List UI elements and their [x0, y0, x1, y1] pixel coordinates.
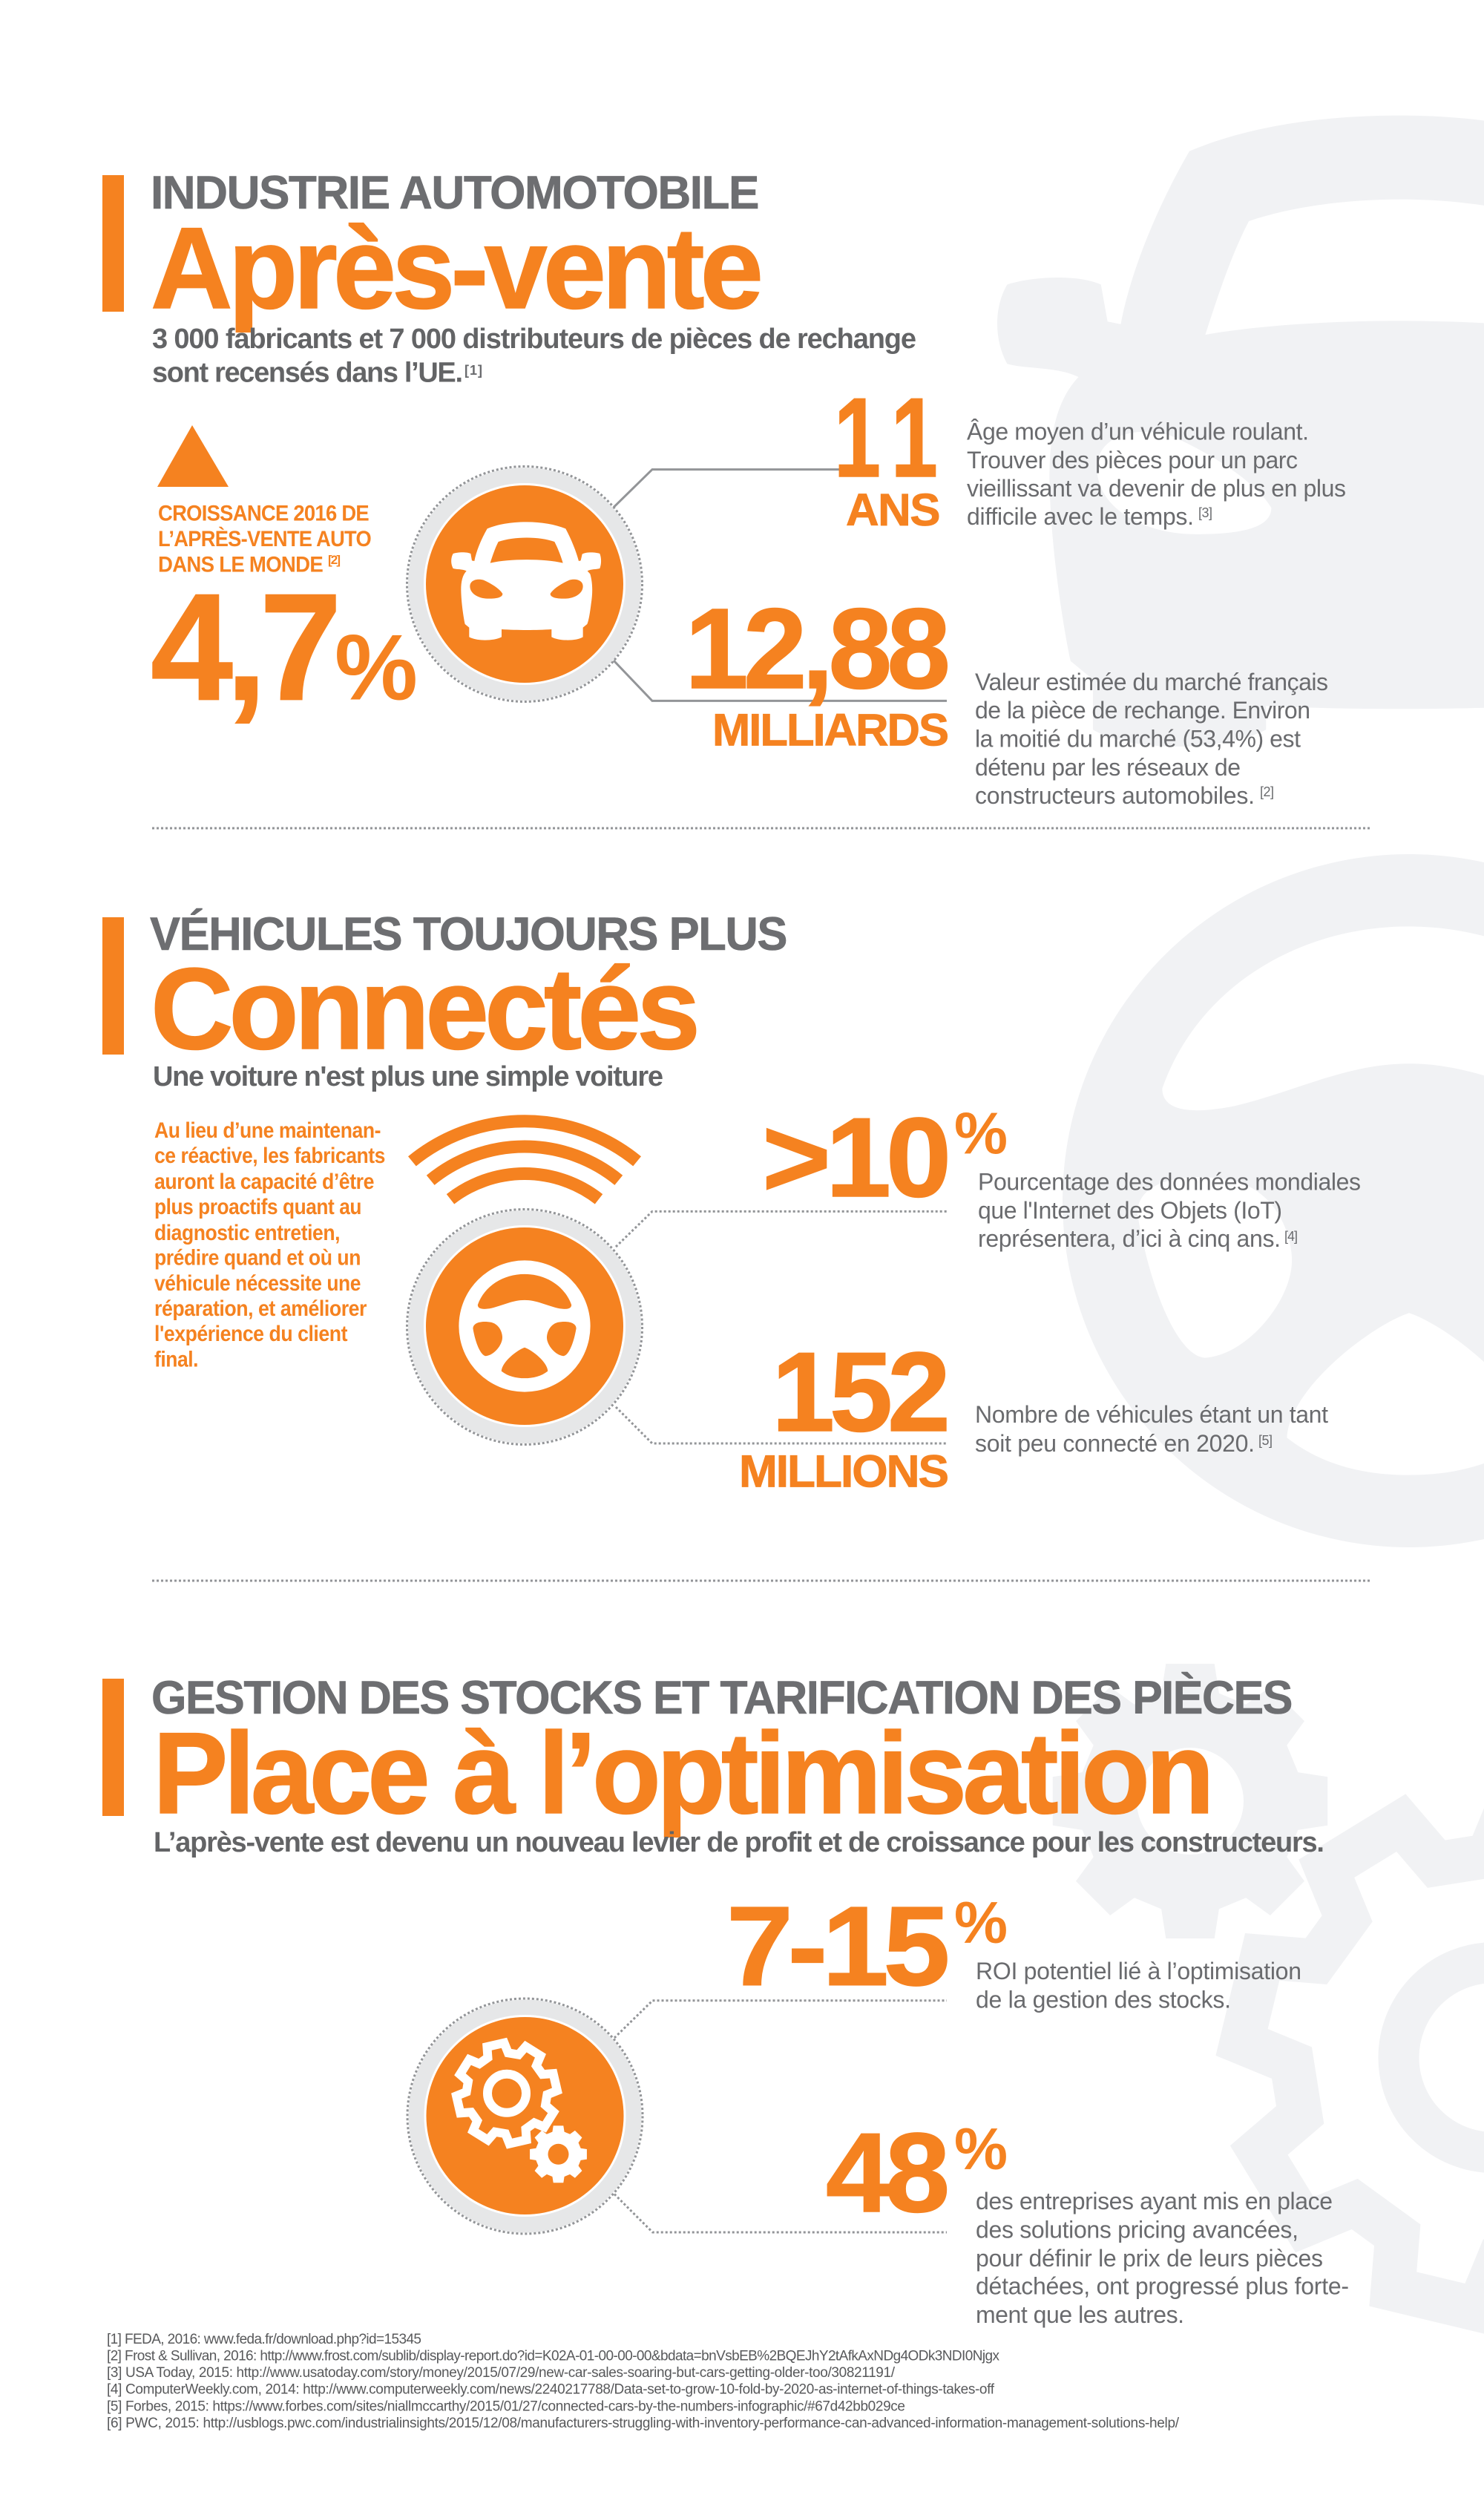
text: vehicle age: difficile avec le temps.: [967, 503, 1194, 530]
text: market value: la moitié du marché (53,4%) est: [975, 726, 1301, 753]
stat: 11 ans: 11: [834, 375, 953, 501]
text: proactive maintenance: prédire quand et où un: [154, 1245, 361, 1271]
heading: INDUSTRIE AUTOMOTOBILE: [151, 167, 758, 219]
stat: 11 ans: [834, 375, 953, 535]
subtitle: 3 000 fabricants et 7 000 distributeurs de pièces de rechange: [152, 324, 916, 355]
icon: steering wheel badge: [407, 1210, 643, 1444]
title: Après-vente: [151, 204, 760, 333]
text: proactive maintenance: plus proactifs quant au: [154, 1195, 361, 1219]
text: proactive maintenance: auront la capacité d’être: [154, 1170, 374, 1194]
text: market value: constructeurs automobiles.: [975, 782, 1255, 809]
subtitle: sont recensés dans l’UE.: [152, 358, 463, 389]
text: market value: Valeur estimée du marché français: [975, 669, 1328, 695]
icon: car badge: [407, 466, 643, 702]
growth label: DANS LE MONDE: [158, 552, 323, 577]
text: connected vehicles: Nombre de véhicules étant un tant: [975, 1401, 1328, 1428]
stat: 152 millions: MILLIONS: [739, 1446, 948, 1496]
stat: 12,88 milliards: MILLIARDS: [712, 705, 948, 755]
panel: section 2 connectés: [102, 908, 1361, 1496]
accent bar: [102, 1679, 124, 1816]
subtitle: L’après-vente est devenu un nouveau levier de profit et de croissance pour les constructeurs.: [154, 1827, 1324, 1858]
growth label: CROISSANCE 2016 DE: [158, 502, 369, 526]
text: proactive maintenance: [154, 1118, 385, 1372]
text: connected vehicles: [975, 1401, 1328, 1457]
subtitle: [152, 324, 916, 389]
growth label: [158, 502, 371, 577]
text: market value: [2]: [1260, 784, 1274, 799]
text: proactive maintenance: diagnostic entretien,: [154, 1221, 340, 1245]
footnotes: [6] PWC, 2015: http://usblogs.pwc.com/industrialinsights/2015/12/08/manufacturers-struggling-with-inventory-performance-can-advanced-information-management-solutions-help/: [107, 2416, 1180, 2431]
text: proactive maintenance: réparation, et améliorer: [154, 1296, 367, 1321]
text: IoT data share: Pourcentage des données mondiales: [978, 1169, 1361, 1196]
text: connected vehicles: [5]: [1258, 1433, 1273, 1448]
text: vehicle age: Âge moyen d’un véhicule roulant.: [967, 419, 1309, 445]
stat: 48%: [826, 2110, 1008, 2236]
footnotes: [4] ComputerWeekly.com, 2014: http://www.computerweekly.com/news/2240217788/Data-set-to-grow-10-fold-by-2020-as-internet-of-things-takes-off: [107, 2382, 995, 2397]
icon: wifi arcs: [412, 1121, 637, 1199]
icon: gears badge: [407, 1999, 643, 2234]
connector lines: [614, 470, 947, 701]
stat: >10%: >10: [762, 1095, 948, 1221]
footnotes: [5] Forbes, 2015: https://www.forbes.com/sites/niallmccarthy/2015/01/27/connected-cars-by-the-numbers-infographic/#67d42bb029ce: [107, 2399, 905, 2415]
icon: up triangle: [157, 425, 229, 487]
text: market value: [975, 669, 1328, 809]
text: pricing solutions: ment que les autres.: [976, 2301, 1184, 2328]
text: IoT data share: que l'Internet des Objets (IoT): [978, 1197, 1282, 1224]
footnotes: [2] Frost & Sullivan, 2016: http://www.frost.com/sublib/display-report.do?id=K02A-01-00-00-00&bdata=bnVsbEB%2BQEJhY2tAfkAxNDg4ODk3NDI0Njgx: [107, 2348, 1000, 2364]
panel: section 1 après-vente: [102, 167, 1346, 809]
stat: 12,88 milliards: 12,88: [685, 585, 947, 712]
background icon: gears: [1053, 1664, 1484, 2357]
stat: >10%: %: [954, 1101, 1008, 1167]
heading: VÉHICULES TOUJOURS PLUS: [150, 908, 787, 960]
stat: 48%: %: [954, 2116, 1008, 2182]
background icon: steering wheel: [1063, 854, 1484, 1547]
text: vehicle age: Trouver des pièces pour un parc: [967, 447, 1298, 473]
stat: 48%: 48: [826, 2110, 947, 2236]
stat: 7-15%: 7-15: [726, 1883, 948, 2010]
text: market value: détenu par les réseaux de: [975, 754, 1241, 781]
text: vehicle age: [967, 419, 1346, 530]
panel: section 3 optimisation: [102, 1672, 1349, 2328]
stat: 7-15%: %: [954, 1889, 1008, 1955]
accent bar: [102, 917, 124, 1055]
text: proactive maintenance: ce réactive, les fabricants: [154, 1144, 385, 1168]
title: Connectés: [151, 945, 696, 1074]
text: vehicle age: [3]: [1198, 505, 1212, 520]
text: proactive maintenance: véhicule nécessite une: [154, 1271, 361, 1296]
background icon: car: [997, 116, 1484, 747]
footnotes: [107, 2332, 1180, 2431]
connector lines: [614, 2001, 947, 2232]
text: proactive maintenance: final.: [154, 1348, 198, 1372]
stat: 152 millions: [739, 1329, 948, 1496]
connector lines: [616, 1211, 947, 1443]
text: ROI: de la gestion des stocks.: [976, 1987, 1231, 2013]
stat: 152 millions: 152: [772, 1329, 946, 1455]
footnotes: [1] FEDA, 2016: www.feda.fr/download.php?id=15345: [107, 2332, 421, 2347]
growth label: [2]: [328, 553, 341, 567]
stat: 4,7%: 4,7: [151, 563, 335, 732]
stat: 4,7%: %: [335, 617, 418, 720]
subtitle: [1]: [464, 363, 482, 378]
text: ROI: [976, 1958, 1301, 2013]
text: market value: de la pièce de rechange. Environ: [975, 697, 1310, 724]
text: IoT data share: [978, 1169, 1361, 1252]
text: ROI: ROI potentiel lié à l’optimisation: [976, 1958, 1301, 1984]
text: pricing solutions: des solutions pricing avancées,: [976, 2216, 1298, 2243]
footnotes: [3] USA Today, 2015: http://www.usatoday.com/story/money/2015/07/29/new-car-sales-soaring-but-cars-getting-older-too/30821191/: [107, 2365, 896, 2381]
text: IoT data share: [4]: [1284, 1229, 1298, 1244]
heading: GESTION DES STOCKS ET TARIFICATION DES PIÈCES: [151, 1672, 1292, 1724]
text: vehicle age: vieillissant va devenir de plus en plus: [967, 475, 1346, 502]
subtitle: Une voiture n'est plus une simple voiture: [153, 1061, 663, 1092]
accent bar: [102, 175, 124, 312]
text: proactive maintenance: l'expérience du client: [154, 1322, 347, 1346]
text: pricing solutions: des entreprises ayant mis en place: [976, 2188, 1333, 2214]
text: pricing solutions: [976, 2188, 1349, 2328]
title: Place à l’optimisation: [153, 1709, 1210, 1838]
text: pricing solutions: pour définir le prix de leurs pièces: [976, 2245, 1323, 2272]
text: pricing solutions: détachées, ont progressé plus forte-: [976, 2272, 1349, 2299]
stat: 11 ans: ANS: [846, 485, 939, 535]
text: connected vehicles: soit peu connecté en 2020.: [975, 1430, 1255, 1457]
text: IoT data share: représentera, d’ici à cinq ans.: [978, 1225, 1281, 1252]
text: proactive maintenance: Au lieu d’une maintenan-: [154, 1118, 381, 1143]
growth label: L’APRÈS-VENTE AUTO: [158, 526, 371, 551]
